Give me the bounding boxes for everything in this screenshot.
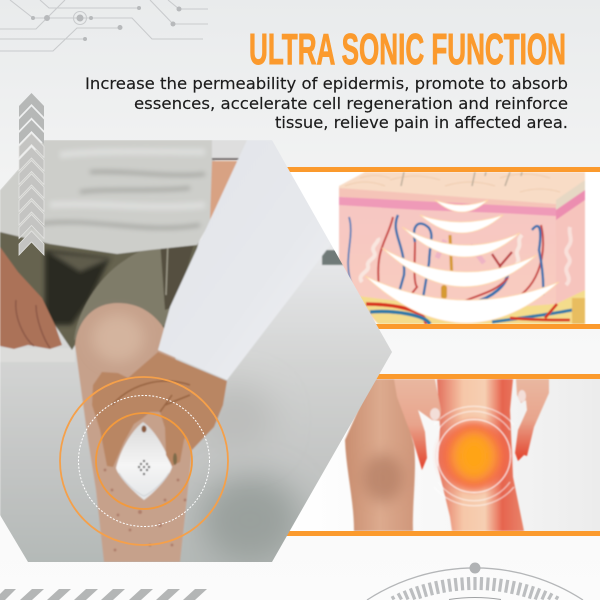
- description text: tissue, relieve pain in affected area.: [275, 113, 568, 132]
- signal rings: [60, 377, 228, 545]
- chevron arrow column: [19, 93, 44, 255]
- right hand: [515, 379, 549, 461]
- doctor hand: [92, 352, 227, 467]
- skin block illustration: [339, 172, 585, 324]
- panel: treatment photo hexagon: [0, 140, 400, 565]
- circuit decoration: [0, 0, 208, 51]
- orange bar: skin bottom: [370, 324, 600, 329]
- orange bar: knee top: [370, 374, 600, 379]
- description text: Increase the permeability of epidermis, promote to absorb: [85, 74, 568, 93]
- description text: essences, accelerate cell regeneration and reinforce: [134, 94, 568, 113]
- panel: knee pain photo: [344, 379, 600, 531]
- left leg: [345, 379, 415, 531]
- shorts: [0, 228, 200, 350]
- orange bar: knee bottom: [285, 531, 600, 536]
- description text: [85, 74, 568, 132]
- white coat: [158, 140, 332, 380]
- patient hand: [0, 247, 62, 349]
- orange bar: skin top: [285, 167, 600, 172]
- dial gauge: [367, 562, 583, 600]
- glowing knee leg: [437, 379, 524, 531]
- left hand: [394, 379, 441, 470]
- bed: [0, 240, 400, 565]
- ultrasonic device: [116, 422, 172, 500]
- panel: skin diagram: [290, 172, 600, 324]
- sleeve and forearm: [212, 140, 246, 160]
- bottom stripes: [0, 589, 207, 600]
- shirt: [0, 140, 215, 254]
- leg: [75, 303, 195, 562]
